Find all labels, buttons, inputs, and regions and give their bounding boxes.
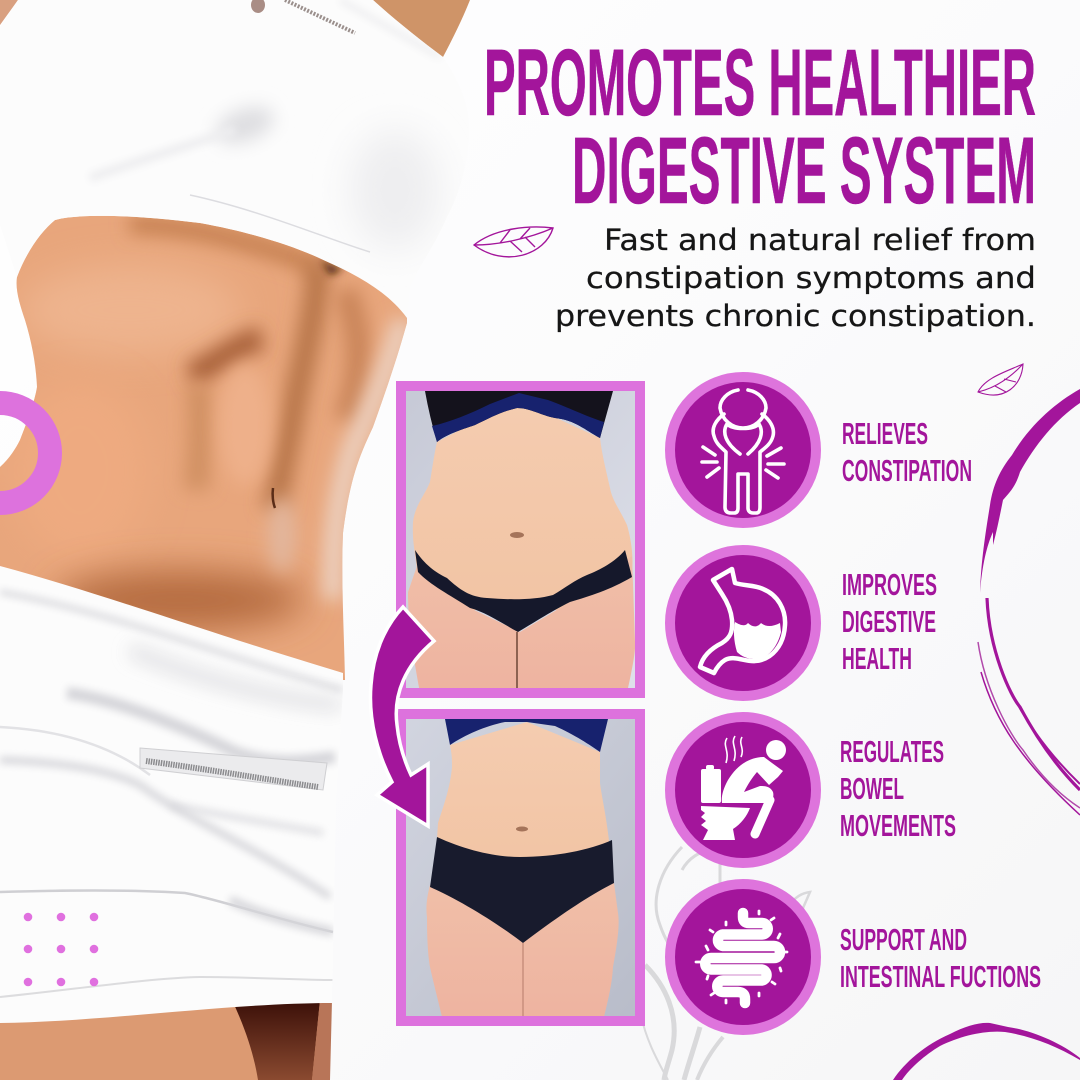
label: regulates bowel movements: BOWEL bbox=[840, 771, 904, 806]
zipper on top bbox=[285, 0, 355, 33]
subtitle text: prevents chronic constipation. bbox=[555, 299, 1036, 333]
white crop top bbox=[0, 0, 469, 318]
white skirt bbox=[0, 566, 343, 1023]
label: improves digestive health: IMPROVES bbox=[842, 567, 937, 602]
decorative ring left bbox=[0, 403, 50, 503]
decorative grey leaves bbox=[640, 847, 810, 1080]
label: relieves constipation: RELIEVES bbox=[842, 416, 928, 451]
before photo panel bbox=[401, 386, 640, 693]
brush arc bottom right bbox=[893, 1023, 1080, 1080]
neck skin bbox=[373, 0, 470, 57]
label: relieves constipation: CONSTIPATION bbox=[842, 453, 972, 488]
icon badge: toilet bbox=[670, 717, 816, 863]
icon badge: stomach bbox=[670, 550, 816, 696]
legs bbox=[0, 995, 332, 1080]
after frame bbox=[401, 714, 640, 1021]
icon: small leaf bbox=[978, 364, 1023, 395]
label: regulates bowel movements: MOVEMENTS bbox=[840, 808, 956, 843]
before frame bbox=[401, 386, 640, 693]
model torso photo bbox=[0, 0, 470, 1080]
subtitle text bbox=[555, 223, 1036, 333]
brush circle right bbox=[893, 389, 1080, 1080]
arrow bbox=[370, 607, 434, 826]
skirt zipper bbox=[140, 748, 327, 790]
icon badge: intestines bbox=[670, 884, 816, 1030]
label: support and intestinal fuctions: SUPPORT AND bbox=[840, 922, 967, 957]
subtitle text: constipation symptoms and bbox=[586, 261, 1036, 295]
label: improves digestive health bbox=[842, 567, 937, 676]
label: support and intestinal fuctions bbox=[840, 922, 1041, 994]
subtitle text: Fast and natural relief from bbox=[604, 223, 1036, 257]
before photo bbox=[401, 386, 640, 693]
label: improves digestive health: DIGESTIVE bbox=[842, 604, 936, 639]
label: regulates bowel movements: REGULATES bbox=[840, 734, 944, 769]
icon: purple leaf top bbox=[474, 227, 553, 257]
label: relieves constipation bbox=[842, 416, 972, 488]
label: regulates bowel movements bbox=[840, 734, 956, 843]
icon badge: relieves constipation bbox=[670, 377, 816, 523]
after photo bbox=[401, 714, 640, 1021]
abdomen skin bbox=[0, 216, 407, 680]
after photo panel bbox=[401, 714, 640, 1021]
label: improves digestive health: HEALTH bbox=[842, 641, 912, 676]
title bbox=[484, 30, 1036, 224]
decorative dots bbox=[24, 913, 98, 986]
